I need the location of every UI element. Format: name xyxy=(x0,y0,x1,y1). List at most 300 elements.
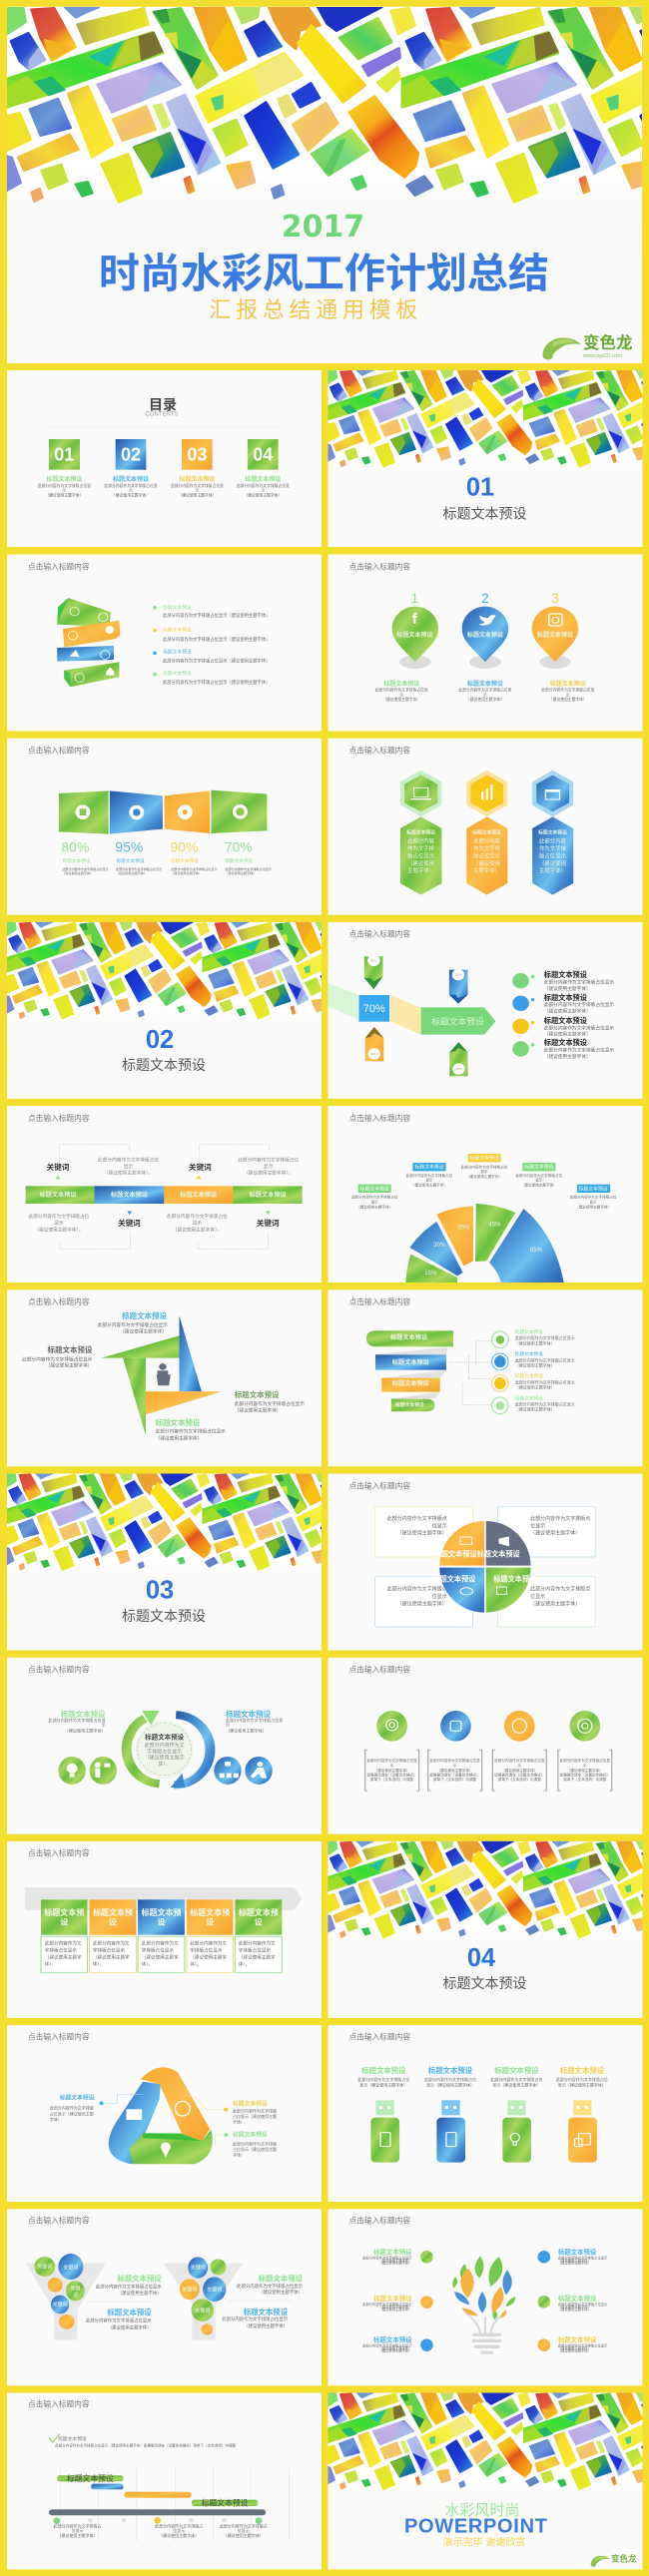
keywords: 关键词 xyxy=(189,1162,212,1172)
contents labels: 标题文本预设 xyxy=(113,475,149,483)
labels: 此部分内容作为文字排版占位 xyxy=(406,1173,453,1178)
labels and descriptions: 标题文本预设 xyxy=(63,857,91,864)
bulb items right: （建议使用主题字体） xyxy=(558,2261,591,2266)
band: 标题文本预设 xyxy=(180,1191,218,1199)
funnels and bubbles: 词 xyxy=(73,2292,78,2299)
pin captions: （建议使用主题字体） xyxy=(382,697,420,702)
band descriptions: 此部分内容作为文字排版占位 xyxy=(167,1213,228,1220)
milestone text: 此部分内容作为文字排版占 xyxy=(155,2522,203,2528)
list items: 此部分内容作为文字排版占位显示（建议使用主题字体） xyxy=(163,657,270,665)
slide: funnel tree xyxy=(327,1289,643,1466)
labels and descriptions: 此部分内容作为文字排版占位显示 xyxy=(226,866,272,871)
mosaic xyxy=(7,922,322,1020)
band: 标题文本预设 xyxy=(111,1191,149,1199)
slide heading: 点击输入标题内容 xyxy=(349,2032,410,2042)
list items: 此部分内容作为文字排版占位显示（建议使用主题字体） xyxy=(163,636,270,643)
slide: hexagons xyxy=(327,739,643,915)
labels: 此部分内容作为文字排版占位 xyxy=(515,1173,563,1178)
captions: 此部分内容作为文字排版占位 xyxy=(424,2076,476,2082)
contents descriptions: （建议使用主题字体） xyxy=(45,492,83,497)
section title: 标题文本预设 xyxy=(122,1608,206,1624)
callouts: 标题文本预设 xyxy=(233,2130,268,2138)
captions: 标题文本预设 xyxy=(494,2066,539,2075)
list: 此部分内容作为文字排版占位显示 xyxy=(544,978,614,985)
column text: （建议使用主题字 xyxy=(239,1953,276,1960)
milestone text: 此部分内容作为文字排版占 xyxy=(54,2522,102,2528)
icon circles xyxy=(58,1757,273,1785)
hexagon columns: 主题字体） xyxy=(473,866,500,874)
labels and descriptions: （建议使用主题字体） xyxy=(62,870,93,875)
tree labels: 此部分内容作为文字排版占位显示 xyxy=(515,1356,575,1362)
stacked bars: 标题文本预设 xyxy=(395,1401,424,1408)
column text: 字排版占位显示 xyxy=(45,1946,77,1953)
pin captions: 此部分内容作为文字排版占位显 xyxy=(375,688,428,693)
icon circles xyxy=(376,1711,600,1742)
labels and descriptions: 此部分内容作为文字排版占位显示 xyxy=(62,866,109,871)
slide: map pins xyxy=(327,555,643,731)
slide heading: 点击输入标题内容 xyxy=(28,2399,90,2409)
tree labels: （建议使用主题字体） xyxy=(515,1339,555,1345)
flow bands xyxy=(327,983,495,1035)
slide: keyword band xyxy=(7,1106,322,1283)
list: （建议使用主题字体） xyxy=(544,1053,591,1060)
milestone text: （建议使用主题字体） xyxy=(224,2532,264,2538)
hexagon columns: 标题文本预设 xyxy=(472,829,501,836)
bulb items right: （建议使用主题字体） xyxy=(558,2307,591,2312)
stacked bars: 标题文本预设 xyxy=(390,1333,428,1341)
text boxes: 此部分内容作为文字排版点 xyxy=(387,1515,447,1522)
slide: section 02 xyxy=(7,922,322,1099)
section number: 02 xyxy=(146,1026,174,1054)
text blocks: （建议使用主题字体） xyxy=(235,1406,282,1413)
tree labels: 标题文本预设 xyxy=(515,1394,543,1401)
funnel captions: 此部分内容作为文字排版占位显示 xyxy=(222,2316,289,2322)
callouts: 标题文本预设 xyxy=(233,2100,268,2108)
text boxes: 此部分内容作为文字排版点 xyxy=(530,1585,590,1592)
labels and descriptions xyxy=(62,857,272,875)
hexagon columns: 标题文本预设 xyxy=(406,829,435,836)
main title: 时尚水彩风工作计划总结 xyxy=(99,251,549,296)
slide: half ring chart xyxy=(327,1106,643,1283)
funnel captions: 标题文本预设 xyxy=(244,2308,289,2317)
closing headline: 水彩风时尚 xyxy=(444,2502,520,2519)
intro text xyxy=(49,2433,236,2447)
labels and descriptions: 标题文本预设 xyxy=(225,857,254,864)
slide: arrows flow xyxy=(327,922,643,1099)
pins: 标题文本预设 xyxy=(467,631,503,639)
side texts: 示 xyxy=(102,1723,106,1728)
hexagon columns: （建议使用 xyxy=(407,859,434,867)
text blocks: 标题文本预设 xyxy=(122,1310,167,1320)
slide: folded banner xyxy=(7,739,322,915)
captions: 显示（建议使用主题字体） xyxy=(426,2081,474,2087)
pins: f xyxy=(412,611,418,628)
contents labels: 标题文本预设 xyxy=(179,475,215,483)
percentages: 80% xyxy=(61,838,89,854)
labels: （建议使用主题字体） xyxy=(411,1183,447,1188)
slide: leaf light bulb xyxy=(327,2209,643,2385)
pin captions xyxy=(375,680,595,702)
percentages: 90% xyxy=(170,838,198,854)
contents descriptions: 示 xyxy=(261,489,265,493)
column text: （建议使用主题字 xyxy=(45,1953,82,1960)
column text xyxy=(45,1939,276,1967)
text boxes: （建议使用主题字体） xyxy=(397,1600,447,1607)
bracket text columns: （建议使用主题字体） xyxy=(501,1768,537,1773)
labels and descriptions: 此部分内容作为文字排版占位显示 xyxy=(116,866,162,871)
column text: 体）。 xyxy=(239,1960,250,1967)
text boxes: 位显示 xyxy=(530,1522,545,1529)
list: （建议使用主题字体） xyxy=(544,1008,591,1015)
contents descriptions: （建议使用主题字体） xyxy=(112,492,150,497)
slide heading: 点击输入标题内容 xyxy=(28,561,90,571)
funnels and bubbles: 关键 xyxy=(70,2285,81,2292)
contents descriptions: （建议使用主题字体） xyxy=(244,492,282,497)
contents descriptions: 此部分内容作为文字排版占位显 xyxy=(171,483,224,488)
callouts: 占位显示（建议使用主题 xyxy=(233,2113,277,2119)
ring xyxy=(127,1711,210,1788)
labels: 显示 xyxy=(535,1179,543,1183)
ring: 字排版占位显示 xyxy=(147,1749,182,1756)
funnels and bubbles: 关键词 xyxy=(191,2265,206,2272)
text blocks: 此部分内容作为文字排版占位显示 xyxy=(235,1400,305,1407)
funnels and bubbles: 关键词 xyxy=(53,2302,68,2309)
pin captions: 标题文本预设 xyxy=(467,680,503,688)
text boxes: 位显示 xyxy=(530,1593,545,1600)
bracket text columns: 菜单下（文本选项）中调整 xyxy=(498,1777,541,1782)
mosaic xyxy=(327,1841,649,1938)
funnel captions: 标题文本预设 xyxy=(259,2275,304,2284)
bracket text columns: 此部分内容作为文字排版占位显 xyxy=(366,1758,417,1763)
number squares: 04 xyxy=(253,445,273,465)
contents heading: 目录 xyxy=(149,397,177,413)
icon: leaf bulb xyxy=(452,2256,515,2354)
logo: 变色龙 xyxy=(611,2554,637,2564)
column text: 字排版占位显示 xyxy=(190,1946,223,1953)
text blocks: （建议使用主题字体） xyxy=(120,1328,167,1335)
captions: 此部分内容作为文字排版占位 xyxy=(556,2076,608,2082)
subtitle: 汇报总结通用模板 xyxy=(209,297,422,322)
loop segments xyxy=(109,2067,213,2164)
slide heading: 点击输入标题内容 xyxy=(349,1113,410,1123)
list items: 标题文本预设 xyxy=(163,627,192,634)
percentage arrows: 95% xyxy=(455,973,461,977)
column headers: 设 xyxy=(109,1916,117,1926)
contents descriptions: 示 xyxy=(62,489,66,493)
band: 标题文本预设 xyxy=(250,1191,288,1199)
text blocks: 此部分内容作为文字排版占位显示 xyxy=(156,1428,226,1435)
section number: 03 xyxy=(146,1577,174,1605)
labels: 标题文本预设 xyxy=(524,1164,553,1171)
text blocks: （建议使用主题字体） xyxy=(156,1434,202,1441)
text blocks: 标题文本预设 xyxy=(48,1344,93,1354)
pie quadrants: 标题文本预设 xyxy=(493,1574,536,1583)
slide: spiral triangles xyxy=(7,1289,322,1466)
labels: 显示 xyxy=(425,1179,433,1183)
bulb items left: （建议使用主题字体） xyxy=(379,2307,411,2312)
slide: closing xyxy=(327,2393,649,2569)
number squares: 03 xyxy=(187,445,207,465)
band xyxy=(26,1186,303,1204)
tree labels: 标题文本预设 xyxy=(515,1328,543,1335)
column headers: 标题文本预 xyxy=(142,1907,182,1917)
mosaic: watercolor tiles xyxy=(7,7,649,202)
slide: arrow columns xyxy=(7,1841,322,2018)
slide heading: 点击输入标题内容 xyxy=(28,2215,90,2225)
ring segments: 35% xyxy=(457,1225,470,1231)
bracket text columns: （建议使用主题字体） xyxy=(374,1768,410,1773)
slide: four circles xyxy=(327,1658,643,1834)
column text: 字排版占位显示 xyxy=(142,1946,174,1953)
list: 此部分内容作为文字排版占位显示 xyxy=(544,1001,614,1008)
milestone text: 位显示 xyxy=(72,2527,84,2533)
captions: 标题文本预设 xyxy=(428,2066,473,2075)
percentage arrows: 60% xyxy=(455,1067,462,1071)
pin captions: 示 xyxy=(399,693,403,697)
hexagon columns: （建议使用 xyxy=(539,859,566,867)
bracket text columns: （建议使用主题字体） xyxy=(437,1768,473,1773)
bulb items right: 标题文本预设 xyxy=(558,2248,597,2257)
list: 标题文本预设 xyxy=(544,1038,587,1047)
slide: section 03 xyxy=(7,1473,322,1651)
pins: 2 xyxy=(481,590,489,606)
slide heading: 点击输入标题内容 xyxy=(28,1113,90,1123)
year: 2017 xyxy=(282,210,364,245)
percentages xyxy=(61,838,253,854)
bracket text columns: 此部分内容作为文字排版占位显 xyxy=(560,1758,610,1763)
ring segments: 15% xyxy=(424,1271,437,1277)
bracket text columns: （建议使用主题字体） xyxy=(567,1768,603,1773)
slide heading: 点击输入标题内容 xyxy=(28,1664,90,1674)
column text: 字排版占位显示 xyxy=(239,1946,271,1953)
milestone text: 位显示 xyxy=(173,2527,185,2533)
funnel captions xyxy=(86,2275,304,2330)
funnel captions: 标题文本预设 xyxy=(117,2275,162,2284)
contents descriptions: （建议使用主题字体） xyxy=(178,492,216,497)
captions: 标题文本预设 xyxy=(560,2066,605,2075)
hexagon columns: 版占位显示 xyxy=(539,852,567,860)
text blocks: 此部分内容作为文字排版占位显示 xyxy=(22,1355,93,1362)
hexagon columns: 标题文本预设 xyxy=(538,829,567,836)
column text: 体）。 xyxy=(45,1960,56,1967)
bulb items right: （建议使用主题字体） xyxy=(558,2345,591,2350)
band descriptions xyxy=(28,1156,299,1233)
bracket text columns: 菜单下（文本选项）中调整 xyxy=(433,1777,477,1782)
labels: （建议使用主题字体） xyxy=(575,1204,611,1209)
callouts: 占位显示（建议使用主题 xyxy=(233,2146,277,2152)
bulb items left xyxy=(362,2248,433,2352)
list: （建议使用主题字体） xyxy=(544,985,591,992)
list: 标题文本预设 xyxy=(544,1016,587,1025)
mosaic xyxy=(7,1473,322,1571)
bulb items right: （建议使用主题字体） xyxy=(558,2347,591,2352)
pie quadrants: 标题文本预设 xyxy=(432,1574,475,1583)
column headers: 设 xyxy=(60,1916,68,1926)
ring: 标题文本预设 xyxy=(145,1732,185,1741)
slide: section 01 xyxy=(327,370,649,547)
bulb items left: （建议使用主题字体） xyxy=(379,2261,411,2266)
list items: 标题文本预设 xyxy=(163,648,192,655)
number squares: 01 xyxy=(54,445,74,465)
column text: （建议使用主题字 xyxy=(190,1953,227,1960)
folded panels xyxy=(59,790,267,834)
bracket text columns: 此部分内容作为文字排版占位显 xyxy=(494,1758,545,1763)
dashed connectors and markers xyxy=(56,1145,271,1250)
pins: 标题文本预设 xyxy=(537,631,573,639)
funnels and bubbles: 关键词 xyxy=(37,2264,52,2271)
column headers xyxy=(41,1899,282,1935)
contents descriptions: 示 xyxy=(129,489,133,493)
labels: 标题文本预设 xyxy=(470,1155,499,1162)
percentage arrows: 40% xyxy=(371,1052,377,1056)
labels: （建议使用主题字体） xyxy=(466,1174,502,1179)
hexagon columns: 作为文字排 xyxy=(539,844,567,852)
side texts xyxy=(48,1709,283,1734)
bulb items left: 标题文本预设 xyxy=(373,2335,412,2344)
bracket text columns: 示 xyxy=(583,1764,587,1768)
section title: 标题文本预设 xyxy=(443,1975,527,1991)
bulb items left: 标题文本预设 xyxy=(373,2294,412,2303)
slide heading: 点击输入标题内容 xyxy=(28,1847,90,1857)
text boxes: （建议使用主题字体） xyxy=(530,1600,580,1607)
tree labels: 标题文本预设 xyxy=(515,1350,543,1357)
bulb items right: 此部分内容作为文字排版占位显示 xyxy=(558,2342,608,2347)
bulb items left: （建议使用主题字体） xyxy=(379,2345,411,2350)
funnel captions: （建议使用主题字体） xyxy=(118,2290,162,2297)
text blocks: 此部分内容作为文字排版占位显示 xyxy=(98,1321,168,1328)
usb drives xyxy=(370,2100,597,2163)
pin captions: （建议使用主题字体） xyxy=(466,697,504,702)
slide: timeline xyxy=(7,2393,322,2569)
list items: 此部分内容作为文字排版占位显示（建议使用主题字体） xyxy=(163,612,270,619)
slide heading: 点击输入标题内容 xyxy=(349,2215,410,2225)
contents heading: CONTENTS xyxy=(146,411,178,417)
text boxes: 此部分内容作为文字排版点 xyxy=(530,1515,590,1522)
captions xyxy=(357,2066,608,2087)
tree labels: 标题文本预设 xyxy=(515,1372,543,1379)
tree labels: 此部分内容作为文字排版占位显示 xyxy=(515,1334,575,1340)
gantt bars: 标题文本预设 xyxy=(202,2497,249,2507)
captions: 显示（建议使用主题字体） xyxy=(359,2081,407,2087)
slide: contents xyxy=(7,370,322,547)
gray arrow xyxy=(25,1887,303,1910)
column text: 此部分内容作为文 xyxy=(190,1939,227,1946)
time axis and milestones xyxy=(49,2509,266,2524)
3D bands xyxy=(57,598,120,687)
keywords: 关键词 xyxy=(257,1218,280,1228)
logo xyxy=(542,332,633,359)
intro text: 此部分内容作为文字排版占位显示（建议使用主题字体）如需更改请在（设置形状格式）菜单下（文本选项）中调整 xyxy=(55,2443,236,2447)
side texts: 此部分内容作为文字排版占位显 xyxy=(226,1717,283,1723)
pie quadrants: 标题文本预设 xyxy=(477,1549,520,1558)
pie quadrants: 标题文本预设 xyxy=(433,1549,477,1558)
contents heading xyxy=(146,397,178,417)
flow bands: 标题文本预设 xyxy=(431,1015,484,1026)
captions: 此部分内容作为文字排版占位 xyxy=(490,2076,542,2082)
slide heading: 点击输入标题内容 xyxy=(28,2032,90,2042)
text boxes xyxy=(375,1506,595,1627)
slide heading: 点击输入标题内容 xyxy=(349,1480,410,1490)
milestone text: （建议使用主题字体） xyxy=(159,2532,199,2538)
bulb items right: 此部分内容作为文字排版占位显示 xyxy=(558,2256,608,2261)
percentages: 95% xyxy=(115,838,143,854)
band descriptions: 此部分内容作为文字排版占位 xyxy=(238,1156,299,1163)
pin captions: 此部分内容作为文字排版占位显 xyxy=(458,688,512,693)
bulb items left: 此部分内容作为文字排版占位显示 xyxy=(362,2256,412,2261)
list: 此部分内容作为文字排版占位显示 xyxy=(544,1047,614,1054)
bulb items right xyxy=(538,2248,608,2352)
logo: 变色龙 xyxy=(583,332,633,352)
slide: cover xyxy=(7,7,649,363)
list items: 此部分内容作为文字排版占位显示（建议使用主题字体） xyxy=(163,679,270,686)
slide heading: 点击输入标题内容 xyxy=(28,746,90,756)
pie quadrants xyxy=(432,1521,536,1613)
bulb items right: （建议使用主题字体） xyxy=(558,2258,591,2263)
bracket text columns xyxy=(365,1750,612,1791)
list: （建议使用主题字体） xyxy=(544,1031,591,1038)
bulb items right: （建议使用主题字体） xyxy=(558,2304,591,2309)
section title: 标题文本预设 xyxy=(443,505,527,521)
pins: 1 xyxy=(411,590,419,606)
text boxes: 位显示 xyxy=(432,1522,447,1529)
bulb items right: 此部分内容作为文字排版占位显示 xyxy=(558,2302,608,2307)
bracket text columns: 示 xyxy=(453,1764,457,1768)
contents descriptions: 此部分内容作为文字排版占位显 xyxy=(104,483,158,488)
gantt bars: 标题文本预设 xyxy=(67,2473,114,2483)
column headers: 设 xyxy=(158,1916,166,1926)
labels: 此部分内容作为文字排版占位 xyxy=(351,1195,398,1200)
side texts: 标题文本预设 xyxy=(61,1709,106,1719)
callouts: 占位显示（建议使用主题 xyxy=(50,2110,94,2116)
column text: 此部分内容作为文 xyxy=(142,1939,179,1946)
pin captions: 此部分内容作为文字排版占位显 xyxy=(541,688,595,693)
stacked bars xyxy=(366,1330,453,1411)
captions: 此部分内容作为文字排版占位 xyxy=(357,2076,409,2082)
labels and descriptions: （建议使用主题字体） xyxy=(116,870,147,875)
ring segments xyxy=(405,1204,564,1283)
band descriptions: 显示 xyxy=(264,1164,274,1169)
ring segments: 45% xyxy=(488,1223,501,1229)
slide: circular loop xyxy=(7,1658,322,1834)
callouts: 此部分内容作为文字排版 xyxy=(233,2107,277,2113)
tree labels: 此部分内容作为文字排版占位显示 xyxy=(515,1378,575,1384)
mosaic xyxy=(327,370,649,467)
pin captions: 标题文本预设 xyxy=(383,680,419,688)
side texts: 此部分内容作为文字排版占位显 xyxy=(48,1717,106,1723)
section number: 04 xyxy=(467,1944,496,1972)
thanks line: 演示完毕 谢谢欣赏 xyxy=(443,2535,525,2548)
column text: （建议使用主题字 xyxy=(142,1953,179,1960)
pins: 标题文本预设 xyxy=(396,631,432,639)
slide: usb sticks xyxy=(327,2025,643,2202)
pin captions: 示 xyxy=(566,693,570,697)
gantt bars xyxy=(57,2473,258,2507)
section title: 标题文本预设 xyxy=(122,1057,206,1073)
list xyxy=(512,970,614,1060)
column text: 体）。 xyxy=(190,1960,202,1967)
keywords: 关键词 xyxy=(118,1218,141,1228)
hexagon columns: 此部分内容 xyxy=(473,837,501,845)
column text: 此部分内容作为文 xyxy=(239,1939,276,1946)
contents descriptions xyxy=(38,483,290,497)
contents labels: 标题文本预设 xyxy=(46,475,82,483)
column text: 此部分内容作为文 xyxy=(45,1939,82,1946)
side texts: 标题文本预设 xyxy=(226,1709,271,1719)
bracket text columns: 示 xyxy=(518,1764,522,1768)
bracket text columns: 菜单下（文本选项）中调整 xyxy=(370,1777,414,1782)
keywords: 关键词 xyxy=(47,1162,70,1172)
milestone text: 位显示 xyxy=(238,2527,250,2533)
